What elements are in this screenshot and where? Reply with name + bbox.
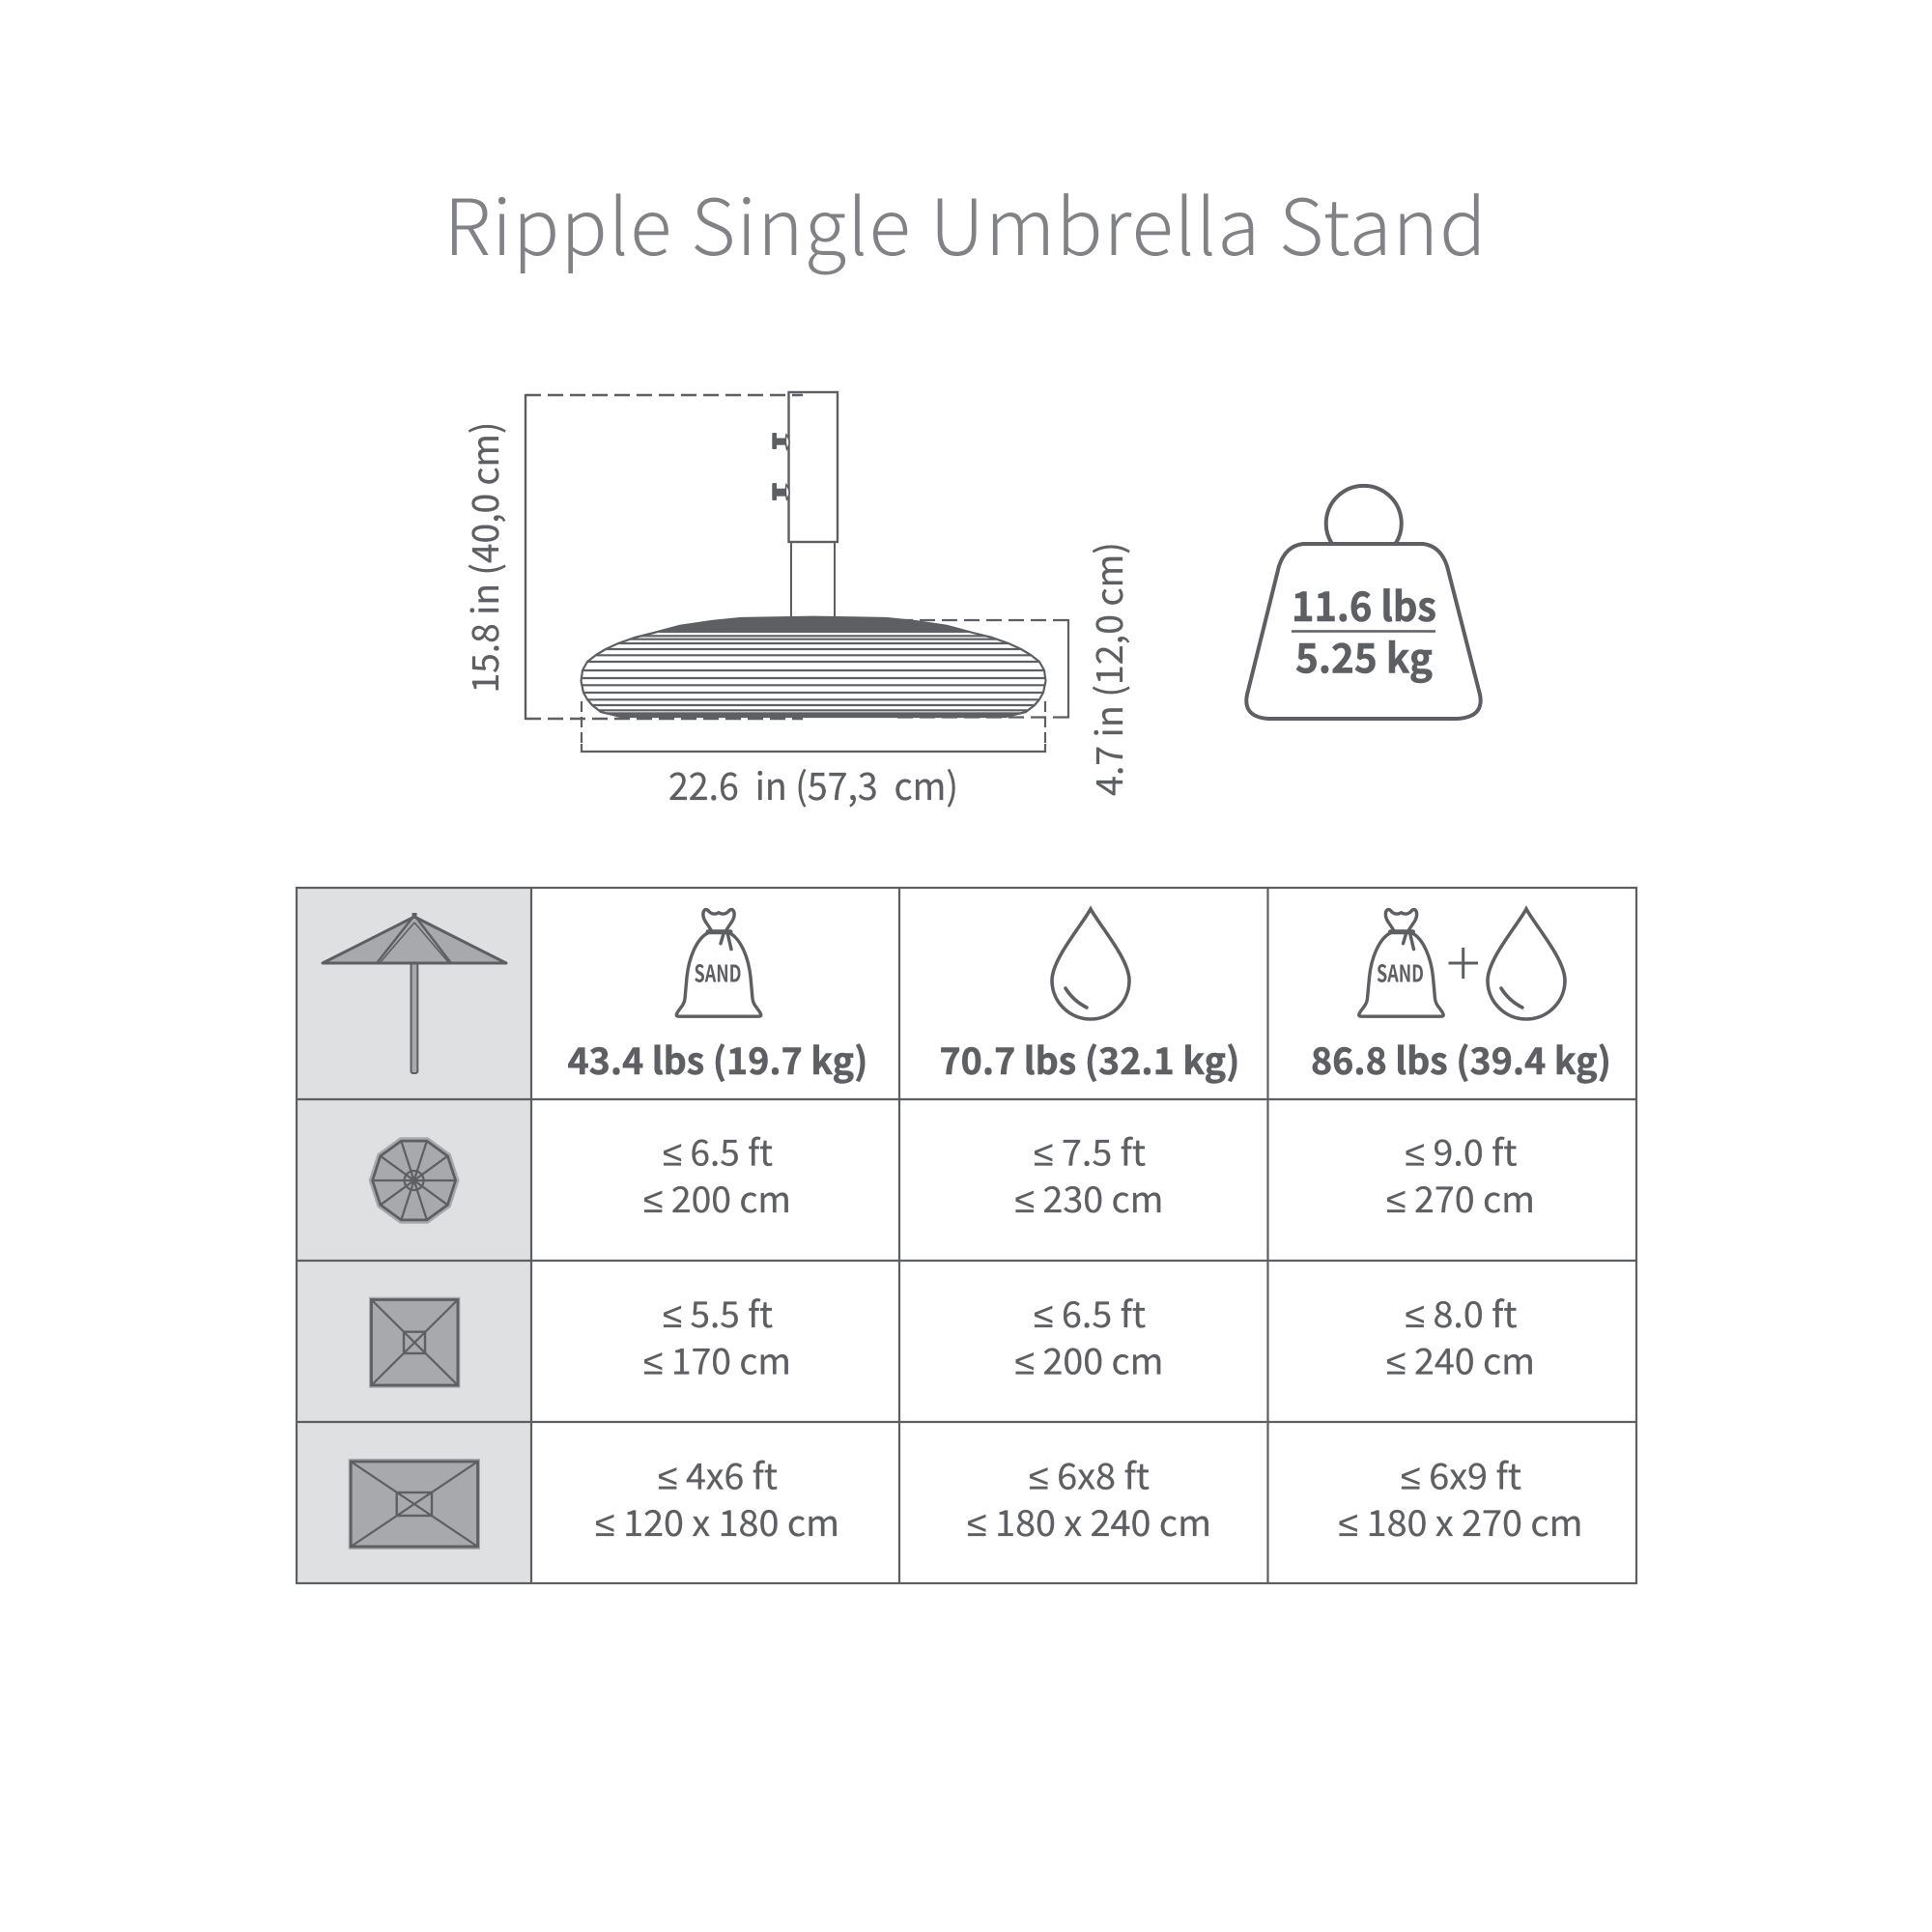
- row: square umbrella limits: ≤ 170 cm: [643, 1333, 791, 1385]
- icon: sand bag plus water drop: SAND: [1377, 955, 1424, 989]
- row: square umbrella limits: [643, 1286, 1535, 1385]
- label: base width: 22.6 in (57,3 cm): [668, 757, 958, 811]
- icon: clamp screw lower: [772, 483, 789, 500]
- icon: sleeve: [788, 392, 838, 542]
- icon: umbrella side view: [323, 913, 506, 1073]
- row: round umbrella limits: ≤ 9.0 ft: [1405, 1124, 1518, 1177]
- diagram: stand side view with dimensions: [456, 392, 1133, 811]
- title: Ripple Single Umbrella Stand: [444, 166, 1486, 278]
- row: round umbrella limits: ≤ 7.5 ft: [1034, 1124, 1146, 1177]
- height dimension line: [526, 394, 803, 720]
- icon: pole: [791, 542, 835, 617]
- icon: square umbrella top view: [369, 1297, 460, 1388]
- weight kg: 5.25 kg: [1295, 626, 1433, 686]
- row: square umbrella limits: ≤ 200 cm: [1014, 1333, 1163, 1385]
- icon: rectangular umbrella top view: [349, 1459, 480, 1549]
- width dimension line: [582, 701, 1045, 752]
- row: round umbrella limits: ≤ 230 cm: [1014, 1171, 1163, 1223]
- row: rectangular umbrella limits: ≤ 180 x 270 cm: [1339, 1494, 1582, 1547]
- table: [297, 888, 1636, 1583]
- row: square umbrella limits: ≤ 6.5 ft: [1034, 1286, 1146, 1338]
- row: round umbrella limits: ≤ 270 cm: [1386, 1171, 1535, 1223]
- row: square umbrella limits: ≤ 8.0 ft: [1405, 1286, 1518, 1338]
- row: round umbrella limits: ≤ 6.5 ft: [663, 1124, 773, 1177]
- label: base height: 4.7 in (12,0 cm): [1080, 542, 1133, 796]
- table grid: [297, 888, 1636, 1583]
- label: sand weight: 43.4 lbs (19.7 kg): [568, 1032, 867, 1085]
- icon: stand base: [580, 614, 1053, 718]
- row: rectangular umbrella limits: ≤ 6x8 ft: [1029, 1447, 1150, 1499]
- row: rectangular umbrella limits: ≤ 120 x 180 cm: [595, 1494, 839, 1547]
- weight handle: [1326, 486, 1402, 544]
- icon: water drop: [1052, 909, 1129, 1019]
- row: rectangular umbrella limits: [595, 1447, 1582, 1547]
- icon: sand bag: SAND: [694, 955, 742, 989]
- left column background: [297, 888, 531, 1583]
- row: rectangular umbrella limits: ≤ 180 x 240 cm: [967, 1494, 1211, 1547]
- icon: round umbrella top view: [369, 1137, 460, 1224]
- row: rectangular umbrella limits: ≤ 4x6 ft: [658, 1447, 778, 1499]
- base height dimension line: [894, 619, 1068, 719]
- row: square umbrella limits: ≤ 240 cm: [1386, 1333, 1535, 1385]
- label: overall height: 15.8 in (40,0 cm): [456, 421, 509, 694]
- icon: weight with product weight: [1246, 486, 1481, 719]
- row: square umbrella limits: ≤ 5.5 ft: [663, 1286, 773, 1338]
- weight lbs: 11.6 lbs: [1292, 575, 1436, 634]
- row: round umbrella limits: [643, 1124, 1535, 1223]
- icon: clamp screw upper: [772, 433, 789, 449]
- icon: sand bag plus water drop: [1359, 909, 1565, 1019]
- label: water weight: 70.7 lbs (32.1 kg): [939, 1032, 1240, 1085]
- icon: sand bag: [676, 910, 761, 1016]
- weight body: [1246, 544, 1481, 719]
- label: sand plus water weight: 86.8 lbs (39.4 kg): [1311, 1032, 1611, 1085]
- row: round umbrella limits: ≤ 200 cm: [643, 1171, 791, 1223]
- row: rectangular umbrella limits: ≤ 6x9 ft: [1401, 1447, 1521, 1499]
